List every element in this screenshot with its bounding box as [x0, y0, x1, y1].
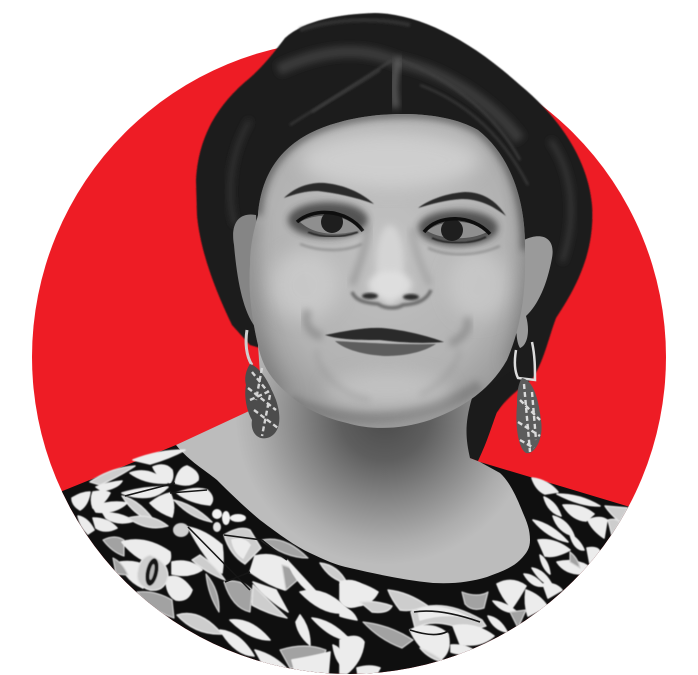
- smile lines: [306, 310, 322, 337]
- right eyebrow: [418, 192, 506, 216]
- braid: [466, 372, 520, 461]
- chin shading: [290, 385, 480, 417]
- flower 1: [130, 471, 167, 483]
- right flowers: [497, 580, 526, 608]
- edge shadow: [250, 218, 288, 392]
- face: [233, 114, 553, 428]
- left earring: [245, 330, 279, 438]
- left eye: [288, 202, 368, 238]
- under-eye creases: [300, 244, 500, 254]
- floral embroidery: left side: [72, 450, 362, 675]
- hairline shadow: [258, 114, 525, 250]
- floral embroidery: bottom center and right: [340, 478, 628, 675]
- cheek light left: [271, 250, 339, 320]
- ear left: [233, 214, 262, 328]
- small blossoms: [173, 509, 246, 537]
- hair: [196, 13, 592, 412]
- ear right: [516, 236, 553, 348]
- side petals: [286, 558, 316, 591]
- flower 2: [72, 492, 90, 510]
- cheek light right: [448, 250, 508, 320]
- large flower with dark center: [103, 537, 124, 556]
- mouth: [325, 328, 444, 356]
- large peony: [411, 606, 486, 629]
- dark leaf veins: [125, 483, 480, 635]
- bottom leaves: [177, 614, 222, 634]
- right earring: [515, 342, 542, 453]
- right eye: [418, 210, 498, 246]
- nose: [352, 225, 431, 308]
- left eyebrow: [284, 183, 374, 204]
- forehead light: [300, 132, 480, 188]
- neck and chest: [176, 345, 540, 595]
- top strip: [133, 450, 185, 464]
- central diamonds: [188, 527, 223, 573]
- embroidered blouse: [60, 445, 630, 675]
